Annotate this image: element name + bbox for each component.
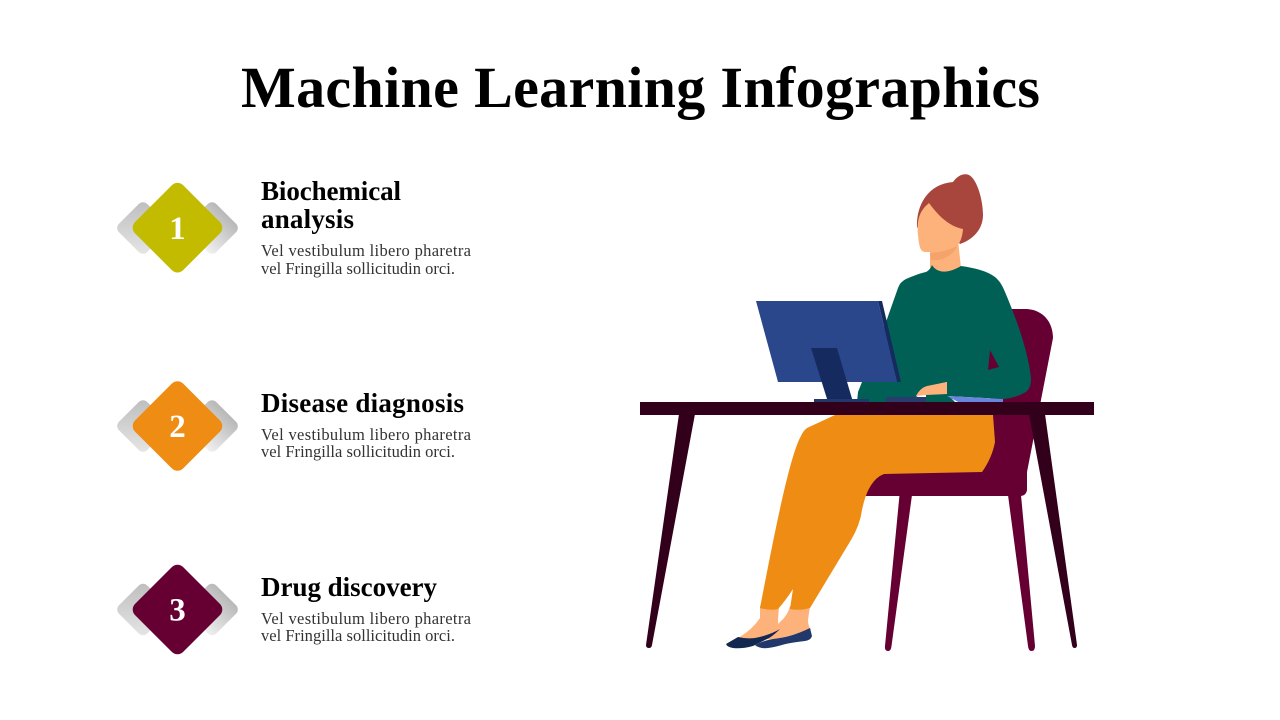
illustration: woman at desk with computer	[640, 174, 1094, 651]
icon: diamond badge 1: 1	[169, 211, 186, 247]
icon: diamond badge 3	[115, 561, 240, 658]
heading: biochemical analysis: Biochemical	[261, 176, 401, 206]
description 2: Vel vestibulum libero pharetra	[261, 425, 472, 444]
person: feet and shoes	[726, 606, 812, 648]
person: hair	[917, 174, 983, 244]
icon: diamond badge 2: 2	[169, 409, 186, 445]
person: hand	[916, 382, 947, 396]
icon: diamond badge 2	[115, 378, 240, 474]
description 2	[261, 425, 472, 461]
person: face	[918, 203, 963, 252]
chair	[860, 309, 1053, 651]
keyboard	[886, 397, 926, 403]
description 1: vel Fringilla sollicitudin orci.	[261, 259, 455, 278]
description 3	[261, 609, 472, 645]
heading: disease diagnosis: Disease diagnosis	[261, 388, 464, 418]
description 3: vel Fringilla sollicitudin orci.	[261, 626, 455, 645]
person: legs	[760, 415, 995, 610]
person: cuff	[926, 394, 955, 402]
title: Machine Learning Infographics	[241, 55, 1040, 120]
heading: drug discovery: Drug discovery	[261, 572, 438, 602]
description 2: vel Fringilla sollicitudin orci.	[261, 442, 455, 461]
person: sweater	[857, 265, 1031, 402]
description 1	[261, 241, 472, 278]
person: neck shadow	[930, 246, 957, 260]
item 2: disease diagnosis	[115, 378, 472, 474]
item 1: biochemical analysis	[115, 176, 472, 278]
item 3: drug discovery	[115, 561, 472, 658]
icon: diamond badge 3: 3	[169, 592, 186, 628]
heading: biochemical analysis: analysis	[261, 204, 354, 234]
description 1: Vel vestibulum libero pharetra	[261, 241, 472, 260]
desk	[640, 402, 1094, 648]
chair gap triangle	[988, 350, 999, 370]
heading: biochemical analysis	[261, 176, 401, 234]
shirt hem	[947, 396, 1003, 403]
description 3: Vel vestibulum libero pharetra	[261, 609, 472, 628]
person: neck	[930, 240, 961, 276]
icon: diamond badge 1	[115, 180, 240, 276]
computer monitor	[756, 301, 901, 403]
